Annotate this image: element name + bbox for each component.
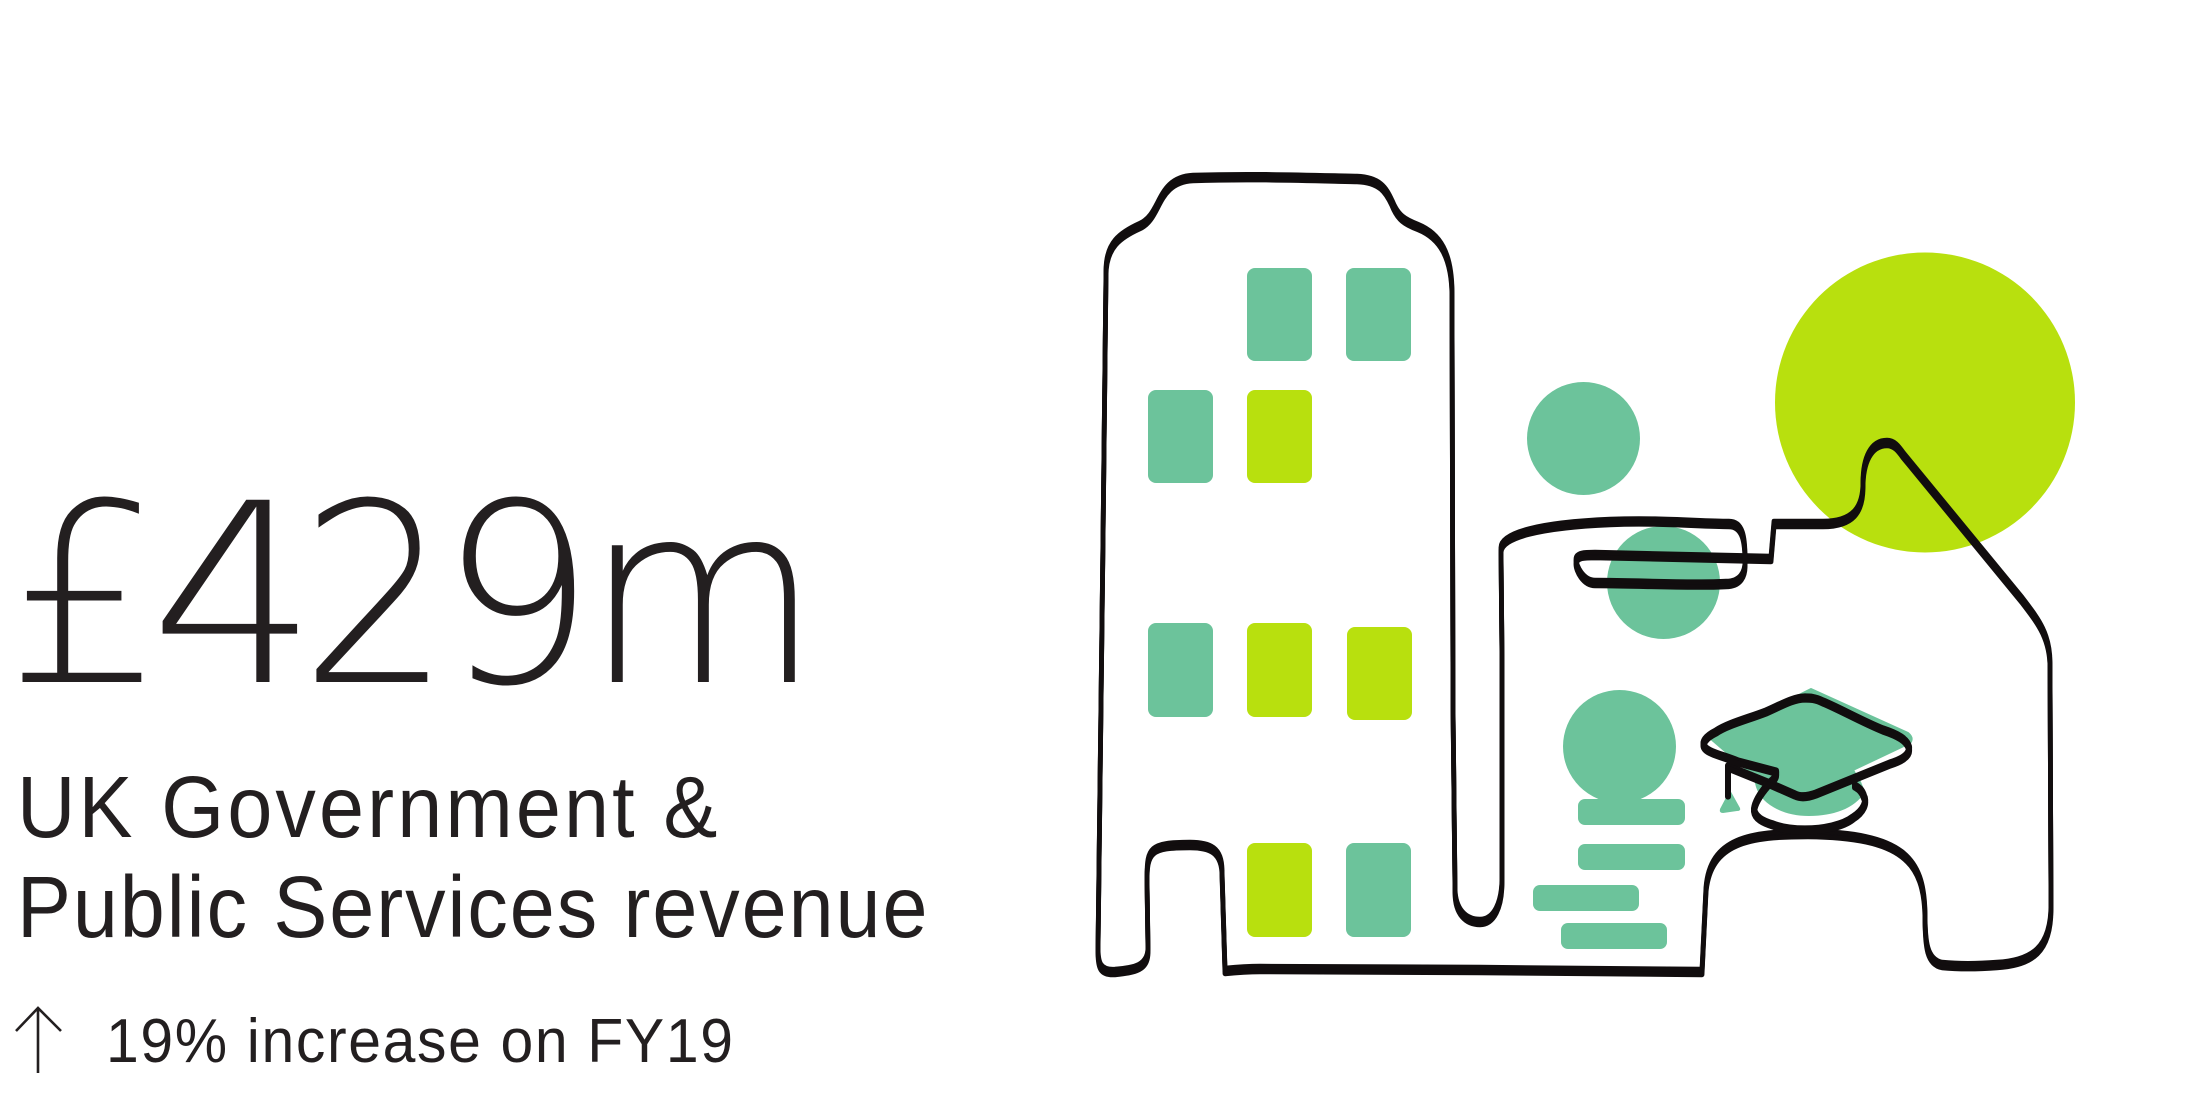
big figure: £429m	[7, 450, 821, 742]
teal circles	[1527, 382, 1720, 803]
text: 19% increase on FY19: 19% increase on FY19	[106, 1006, 733, 1075]
teal bars	[1533, 799, 1685, 949]
big figure: £429m: 2	[300, 450, 451, 741]
illustration: building with graduation cap	[1098, 174, 2075, 975]
graduation cap fill	[1711, 689, 1912, 815]
heading: UK Government & Public Services revenue: UK Government &	[17, 758, 717, 856]
graduation cap outline	[1704, 696, 1909, 832]
building windows	[1148, 268, 1412, 937]
big figure: £429m: £	[7, 451, 163, 742]
building outline	[1098, 174, 2051, 975]
big figure: £429m: m	[584, 451, 821, 742]
heading: UK Government & Public Services revenue	[17, 758, 927, 956]
heading: UK Government & Public Services revenue: Public Services revenue	[17, 858, 927, 956]
lime sun circle	[1775, 252, 2075, 552]
icon: up arrow	[16, 1008, 61, 1073]
big figure: £429m: 9	[440, 451, 595, 742]
big figure: £429m: 4	[150, 450, 318, 741]
